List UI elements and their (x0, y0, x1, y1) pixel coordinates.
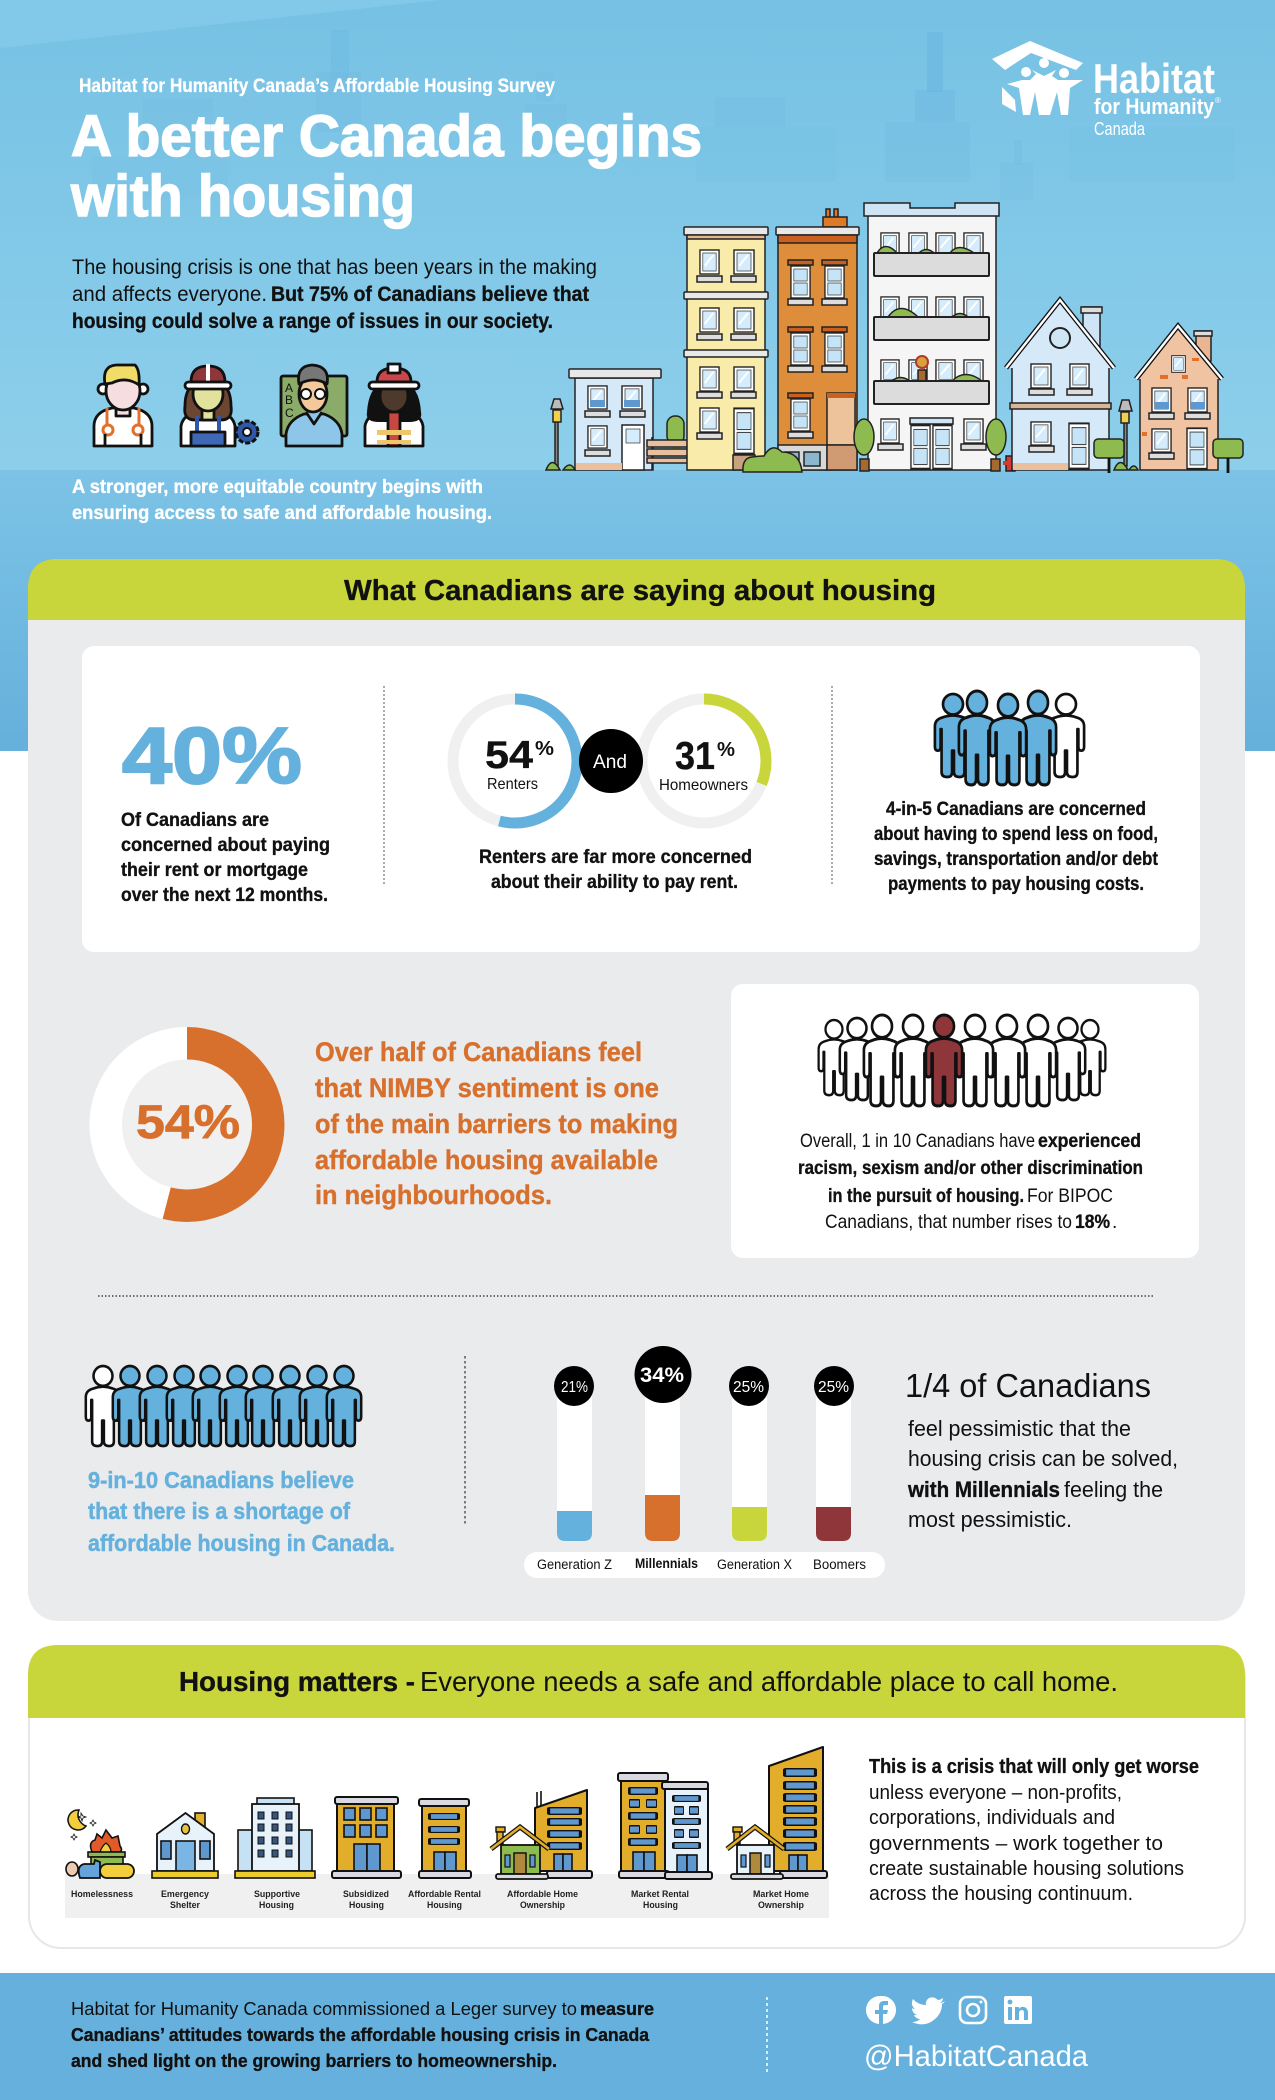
illustration: street of buildings (546, 203, 1243, 473)
icon: teacher (281, 365, 347, 446)
heading band: housing matters: Housing matters - (179, 1666, 415, 1697)
text: 1/4 of Canadians (905, 1367, 1178, 1532)
title: A better Canada begins (71, 104, 702, 169)
icon: doctor (94, 365, 152, 446)
bar: Generation Z: 21% (561, 1379, 588, 1396)
icon: teacher: B (285, 393, 293, 407)
people: 4 in 5 (935, 691, 1084, 785)
logo: Habitat for Humanity Canada: Canada (1094, 119, 1146, 139)
text: 1/4 of Canadians: with Millennials (907, 1477, 1060, 1502)
text: crisis statement: across the housing continuum. (869, 1883, 1133, 1905)
renters caption: about their ability to pay rent. (491, 871, 738, 893)
title: with housing (70, 164, 415, 229)
continuum: Homelessness: Homelessness (71, 1889, 133, 1900)
stat: 40%: their rent or mortgage (121, 859, 308, 881)
bar: Generation X (729, 1366, 769, 1541)
text: discrimination: racism, sexism and/or other discrimination (798, 1158, 1143, 1179)
continuum: Subsidized Housing (332, 1797, 401, 1911)
card: concerns statistics (82, 646, 1200, 952)
bar chart: pessimism by generation (524, 1346, 885, 1578)
text: crisis statement (869, 1756, 1199, 1905)
ring: homeowners 31%: % (717, 739, 735, 761)
continuum: Market Home Ownership (727, 1747, 827, 1911)
icon: teacher: A (285, 381, 293, 395)
bar: Millennials (634, 1346, 692, 1541)
continuum: Affordable Rental Housing: Affordable Rental (408, 1889, 481, 1900)
logo: Habitat for Humanity Canada: Habitat (1093, 55, 1215, 102)
continuum: Market Rental Housing (618, 1773, 712, 1911)
intro text: and affects everyone. (72, 282, 267, 306)
text: 1/4 of Canadians: feeling the (1064, 1477, 1163, 1502)
logo: Habitat for Humanity Canada: for Humanity (1094, 94, 1215, 119)
intro text: housing could solve a range of issues in our society. (72, 309, 553, 333)
stat: 40%: over the next 12 months. (121, 884, 328, 906)
tree and bench (647, 416, 701, 470)
text: 1/4 of Canadians: housing crisis can be solved, (908, 1446, 1178, 1471)
badge: And: And (593, 752, 627, 773)
continuum: Homelessness (66, 1810, 134, 1900)
stat: 40%: Of Canadians are (121, 809, 269, 831)
text: 4-in-5 (874, 798, 1158, 895)
renters caption (479, 846, 752, 893)
text: NIMBY: of the main barriers to making (315, 1109, 678, 1139)
square shrubs (1094, 439, 1124, 473)
header background (0, 0, 1275, 751)
text: crisis statement: governments – work together to (869, 1833, 1163, 1855)
text: NIMBY: that NIMBY sentiment is one (315, 1073, 659, 1103)
white balcony tower (864, 203, 999, 470)
ring: renters 54%: 54 (485, 734, 533, 777)
text: 4-in-5: 4-in-5 Canadians are concerned (886, 798, 1146, 820)
continuum: Emergency Shelter (152, 1813, 218, 1911)
text: 4-in-5: savings, transportation and/or debt (874, 848, 1158, 870)
ring: renters 54%: Renters (487, 776, 538, 793)
stat: 40% (121, 711, 330, 906)
footer text: measure (580, 1999, 654, 2019)
renters caption: Renters are far more concerned (479, 846, 752, 868)
panel: housing matters (28, 1645, 1245, 1948)
continuum: Emergency Shelter: Shelter (170, 1900, 200, 1911)
text: discrimination: in the pursuit of housing. (828, 1186, 1024, 1207)
text: NIMBY: affordable housing available (315, 1145, 658, 1175)
text: 4-in-5: about having to spend less on food, (874, 823, 1158, 845)
text: discrimination: Canadians, that number rises to (825, 1212, 1072, 1233)
continuum: Market Rental Housing: Market Rental (631, 1889, 689, 1900)
continuum: Emergency Shelter: Emergency (161, 1889, 210, 1900)
text: discrimination: . (1112, 1212, 1117, 1233)
continuum: Affordable Rental Housing: Housing (427, 1900, 462, 1911)
text: NIMBY: in neighbourhoods. (315, 1180, 552, 1210)
text: 9-in-10: 9-in-10 Canadians believe (88, 1467, 354, 1493)
panel: what Canadians are saying (28, 559, 1245, 1621)
ring: homeowners 31%: Homeowners (659, 777, 748, 794)
bar: Boomers: 25% (818, 1379, 849, 1396)
icon: facebook (866, 1996, 896, 2024)
generation labels: Millennials (635, 1556, 698, 1571)
ring: renters 54% (453, 699, 577, 823)
continuum: Market Home Ownership: Market Home (753, 1889, 809, 1900)
footer text: and shed light on the growing barriers to homeownership. (71, 2051, 557, 2071)
donut: NIMBY 54% (90, 1027, 284, 1222)
yellow apartment building (684, 227, 768, 470)
text: 4-in-5: payments to pay housing costs. (888, 873, 1144, 895)
text: discrimination: 18% (1075, 1212, 1110, 1233)
bar: Boomers (814, 1366, 854, 1541)
survey label: Habitat for Humanity Canada’s Affordable Housing Survey (79, 76, 555, 97)
icon: instagram (960, 1997, 986, 2023)
continuum: Subsidized Housing: Subsidized (343, 1889, 389, 1900)
bush (743, 448, 802, 472)
continuum: Affordable Rental Housing (408, 1799, 481, 1911)
bar: Generation X: 25% (733, 1379, 764, 1396)
people: 1 in 10 (819, 1015, 1105, 1106)
intro text: But 75% of Canadians believe that (271, 282, 589, 306)
strapline: A stronger, more equitable country begins with (72, 477, 483, 498)
heading band: housing matters (28, 1645, 1245, 1718)
generation labels (524, 1552, 885, 1578)
footer text (71, 1999, 654, 2071)
icon: firefighter (365, 364, 423, 446)
title (70, 104, 702, 229)
text: 1/4 of Canadians: most pessimistic. (908, 1507, 1072, 1532)
icon: teacher: C (285, 406, 294, 420)
heading band: housing matters: Everyone needs a safe and affordable place to call home. (420, 1666, 1118, 1697)
text: 9-in-10: affordable housing in Canada. (88, 1530, 395, 1556)
icon: engineer (181, 364, 258, 446)
intro text (72, 255, 597, 333)
footer (0, 1973, 1275, 2100)
text: discrimination: experienced (1038, 1131, 1141, 1152)
housing continuum (65, 1747, 829, 1918)
donut: NIMBY 54%: 54% (136, 1095, 240, 1148)
logo: Habitat for Humanity Canada: ® (1215, 96, 1221, 105)
ring: homeowners 31% (642, 699, 766, 823)
orange brick building (776, 209, 859, 470)
strapline: ensuring access to safe and affordable housing. (72, 503, 492, 524)
continuum: Affordable Home Ownership: Affordable Home (507, 1889, 578, 1900)
logo: Habitat for Humanity Canada (992, 41, 1221, 139)
social handle: @HabitatCanada (864, 2040, 1088, 2073)
lamp post right (1114, 400, 1138, 470)
ring: homeowners 31%: 31 (675, 735, 715, 778)
bar: Millennials: 34% (640, 1364, 684, 1387)
icon: twitter (912, 1997, 945, 2024)
ring: renters 54%: % (535, 738, 554, 760)
section heading band (28, 559, 1245, 620)
text: crisis statement: unless everyone – non-profits, (869, 1782, 1122, 1804)
icon: linkedin (1004, 1996, 1032, 2024)
text: 1/4 of Canadians: 1/4 of Canadians (905, 1367, 1151, 1404)
intro text: The housing crisis is one that has been years in the making (72, 255, 597, 279)
text: crisis statement: create sustainable housing solutions (869, 1858, 1184, 1880)
lamp post left (546, 399, 575, 470)
text: 9-in-10 (88, 1467, 395, 1556)
continuum: Affordable Home Ownership: Ownership (520, 1900, 565, 1911)
peach brick house (1136, 324, 1222, 470)
footer text: Habitat for Humanity Canada commissioned a Leger survey to (71, 1999, 577, 2019)
small blue building (569, 369, 661, 470)
generation labels: Generation Z (537, 1557, 612, 1572)
section heading band: What Canadians are saying about housing (344, 575, 936, 607)
card: discrimination (731, 984, 1199, 1258)
text: 1/4 of Canadians: feel pessimistic that the (908, 1416, 1131, 1441)
continuum: Supportive Housing: Housing (259, 1900, 294, 1911)
strapline (72, 477, 492, 524)
text: crisis statement: corporations, individuals and (869, 1807, 1115, 1829)
topiary trees (854, 419, 1018, 471)
square shrub right (1213, 439, 1243, 473)
text: 9-in-10: that there is a shortage of (88, 1498, 350, 1524)
continuum: Supportive Housing (235, 1798, 315, 1911)
text: discrimination: For BIPOC (1027, 1186, 1113, 1207)
continuum: Affordable Home Ownership (491, 1790, 592, 1911)
text: discrimination (798, 1131, 1143, 1233)
text: NIMBY: Over half of Canadians feel (315, 1037, 642, 1067)
badge: And (579, 729, 643, 793)
text: NIMBY (315, 1037, 678, 1210)
text: discrimination: Overall, 1 in 10 Canadians have (800, 1131, 1035, 1152)
stat: 40%: concerned about paying (121, 834, 330, 856)
continuum: Market Rental Housing: Housing (643, 1900, 678, 1911)
blue house (1006, 298, 1114, 470)
continuum: Market Home Ownership: Ownership (758, 1900, 804, 1911)
continuum: Supportive Housing: Supportive (254, 1889, 300, 1900)
generation labels: Boomers (813, 1557, 866, 1572)
people: 9 in 10 (86, 1366, 361, 1446)
bar: Generation Z (554, 1366, 594, 1541)
stat: 40%: 40% (122, 711, 302, 800)
generation labels: Generation X (717, 1557, 792, 1572)
text: crisis statement: This is a crisis that will only get worse (869, 1756, 1199, 1778)
footer text: Canadians’ attitudes towards the affordable housing crisis in Canada (71, 2025, 650, 2045)
continuum: Subsidized Housing: Housing (349, 1900, 384, 1911)
